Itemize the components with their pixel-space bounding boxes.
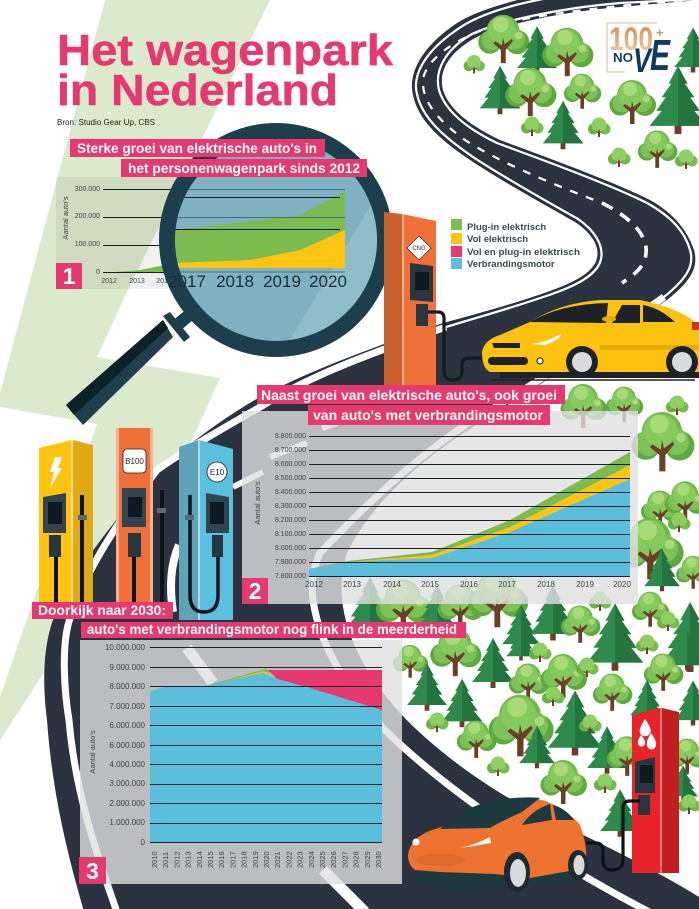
icon: orange car — [408, 797, 588, 892]
logo: 100+ Nové: 100 — [609, 21, 653, 57]
legend: Vol en plug-in elektrisch — [467, 247, 580, 258]
icon: orange B100 pump: B100 — [125, 457, 144, 466]
chart 3 y axis labels: 2.000.000 — [109, 799, 146, 808]
heading: chart 3 — [32, 602, 466, 638]
source line: Bron: Studio Gear Up, CBS — [57, 118, 155, 127]
chart 2 x axis labels: 2012 — [305, 580, 323, 589]
chart 3 x axis labels: 2026 — [329, 851, 338, 868]
chart 3 x axis labels: 2020 — [262, 851, 271, 868]
chart 1 y axis labels: 100.000 — [75, 241, 100, 248]
chart 2 y axis labels: 8.800.000 — [275, 433, 306, 440]
chart 3 x axis labels: 2029 — [363, 851, 372, 868]
chart 3 y axis labels: Aantal auto's — [88, 730, 97, 774]
chart 2 x axis labels: 2015 — [421, 580, 439, 589]
chart 3 x axis labels: 2016 — [217, 851, 226, 868]
title: Het wagenpark — [57, 26, 394, 75]
icon: blue E10 pump: E10 — [210, 468, 225, 477]
chart 3 y axis labels — [88, 643, 146, 847]
chart 2 y axis labels: 8.400.000 — [275, 489, 306, 496]
legend: Plug-in elektrisch — [467, 222, 546, 233]
chart 3 x axis labels: 2011 — [161, 852, 170, 868]
chart 3 x axis labels: 2030 — [374, 851, 383, 868]
logo: 100+ Nové — [607, 21, 671, 80]
chart 3 y axis labels: 3.000.000 — [109, 779, 146, 788]
chart 3 x axis labels: 2019 — [251, 851, 260, 868]
light green background band — [0, 0, 270, 740]
heading: chart 3: auto's met verbrandingsmotor nog flink in de meerderheid — [87, 621, 457, 637]
icon: yellow car — [482, 300, 699, 380]
chart 2 x axis labels: 2016 — [460, 580, 478, 589]
badge 3 — [79, 857, 106, 884]
title: in Nederland — [57, 66, 338, 115]
heading: chart 1: Sterke groei van elektrische auto's in — [77, 140, 317, 156]
forest: trees along the road — [345, 15, 699, 837]
logo: 100+ Nové: + — [656, 25, 664, 40]
chart 2 x axis labels: 2014 — [383, 580, 401, 589]
heading: chart 1: het personenwagenpark sinds 2012 — [128, 160, 360, 176]
legend — [451, 219, 580, 270]
chart 3 area — [150, 669, 382, 842]
chart 2 x axis labels: 2017 — [498, 580, 516, 589]
icon: magnifying glass with enlarged chart: 2018 — [216, 272, 254, 291]
chart 2 x axis labels: 2020 — [613, 580, 631, 589]
panel: chart 3, outlook to 2030 — [80, 640, 402, 884]
chart 3 y axis labels: 7.000.000 — [109, 702, 146, 711]
chart 3 y axis labels: 6.000.000 — [109, 741, 146, 750]
chart 1 x axis labels: 2013 — [129, 278, 145, 285]
badge 3: 3 — [86, 858, 99, 884]
chart 3 y axis labels: 8.000.000 — [109, 682, 146, 691]
icon: yellow electric pump — [39, 440, 93, 610]
badge 2 — [242, 578, 268, 604]
heading: chart 2: Naast groei van elektrische auto's, ook groei — [261, 387, 557, 403]
chart 3 y axis labels: 6.000.000 — [109, 721, 146, 730]
chart 3 x axis labels: 2023 — [296, 851, 304, 868]
chart 3 x axis labels: 2028 — [352, 851, 360, 868]
chart 3 x axis labels: 2018 — [240, 851, 248, 868]
legend: Verbrandingsmotor — [467, 259, 555, 270]
chart 3 y axis labels: 1.000.000 — [109, 818, 146, 827]
chart 2 y axis labels: 8.600.000 — [275, 461, 306, 468]
title — [57, 26, 394, 115]
panel: chart 1, electric cars — [56, 177, 186, 289]
icon: magnifying glass with enlarged chart: 2017 — [168, 272, 206, 291]
chart 3 x axis labels: 2027 — [340, 851, 350, 868]
chart 1 y axis labels — [61, 186, 100, 276]
heading: chart 1 — [70, 139, 367, 177]
chart 3 y axis labels: 4.000.000 — [109, 760, 146, 769]
chart 3 y axis labels: 9.000.000 — [109, 663, 146, 672]
icon: orange B100 pump — [116, 428, 166, 610]
icon: blue E10 pump — [179, 440, 233, 620]
chart 2 x axis labels: 2019 — [576, 580, 594, 589]
heading: chart 3: Doorkijk naar 2030: — [38, 602, 166, 618]
chart 1 gridlines and small area — [103, 190, 180, 272]
chart 2 x axis labels: 2018 — [537, 580, 555, 589]
legend: Vol elektrisch — [467, 234, 528, 245]
chart 3 x axis labels: 2025 — [318, 851, 327, 868]
chart 3 x axis labels — [150, 851, 383, 868]
chart 3 y axis labels: 0 — [141, 838, 146, 847]
icon: red hydrogen pump — [586, 708, 679, 873]
chart 3 y axis labels: 10.000.000 — [105, 643, 146, 652]
chart 3 x axis labels: 2015 — [206, 851, 215, 868]
chart 3 x axis labels: 2022 — [284, 851, 294, 868]
badge 1: 1 — [63, 263, 76, 289]
chart 2 gridlines — [309, 436, 630, 576]
badge 1 — [56, 263, 82, 289]
chart 2 y axis labels: 8.500.000 — [275, 475, 306, 482]
chart 2 x axis labels — [305, 580, 631, 589]
logo: 100+ Nové: V — [633, 42, 654, 80]
chart 1 y axis labels: 0 — [96, 269, 100, 276]
panel: chart 2, growth of combustion cars — [242, 411, 638, 604]
chart 2 y axis labels: 8.200.000 — [275, 517, 306, 524]
chart 1 x axis labels: 2012 — [101, 278, 117, 285]
logo: 100+ Nové: E — [650, 31, 671, 80]
chart 2 y axis labels — [253, 433, 306, 580]
chart 1 y axis labels: 200.000 — [75, 213, 100, 220]
chart 2 y axis labels: 8.000.000 — [275, 545, 306, 552]
chart 2 y axis labels: Aantal auto's — [253, 481, 262, 525]
icon: CNG pump: CNG — [412, 246, 426, 252]
chart 2 y axis labels: 8.300.000 — [275, 503, 306, 510]
chart 2 x axis labels: 2013 — [343, 580, 361, 589]
chart 2 y axis labels: 8.700.000 — [275, 447, 306, 454]
chart 3 x axis labels: 2010 — [150, 851, 159, 868]
chart 2 y axis labels: 7.900.000 — [275, 559, 306, 566]
chart 2 y axis labels: 7.800.000 — [275, 573, 306, 580]
icon: magnifying glass with enlarged chart: 2020 — [309, 272, 347, 291]
icon: magnifying glass with enlarged chart — [66, 123, 393, 425]
chart 3 x axis labels: 2012 — [172, 851, 182, 868]
chart 1 x axis labels: 2014 — [156, 278, 172, 285]
icon: CNG pump — [384, 212, 483, 385]
heading: chart 2 — [257, 385, 565, 425]
chart 3 x axis labels: 2013 — [184, 851, 192, 868]
chart 3 gridlines — [150, 648, 382, 842]
badge 2: 2 — [249, 578, 261, 604]
heading: chart 2: van auto's met verbrandingsmotor — [313, 407, 544, 423]
chart 1 y axis labels: 300.000 — [75, 186, 100, 193]
logo: 100+ Nové: NO — [613, 50, 633, 65]
chart 2 y axis labels: 8.100.000 — [275, 531, 306, 538]
chart 3 x axis labels: 2014 — [195, 851, 204, 868]
chart 3 x axis labels: 2017 — [228, 851, 238, 868]
chart 1 y axis labels: Aantal auto's — [61, 196, 70, 240]
chart 2 area — [309, 452, 630, 576]
icon: magnifying glass with enlarged chart: 2019 — [263, 272, 301, 291]
chart 3 x axis labels: 2024 — [307, 851, 316, 868]
chart 3 x axis labels: 2021 — [273, 851, 282, 868]
chart 1 x axis labels — [101, 278, 172, 285]
